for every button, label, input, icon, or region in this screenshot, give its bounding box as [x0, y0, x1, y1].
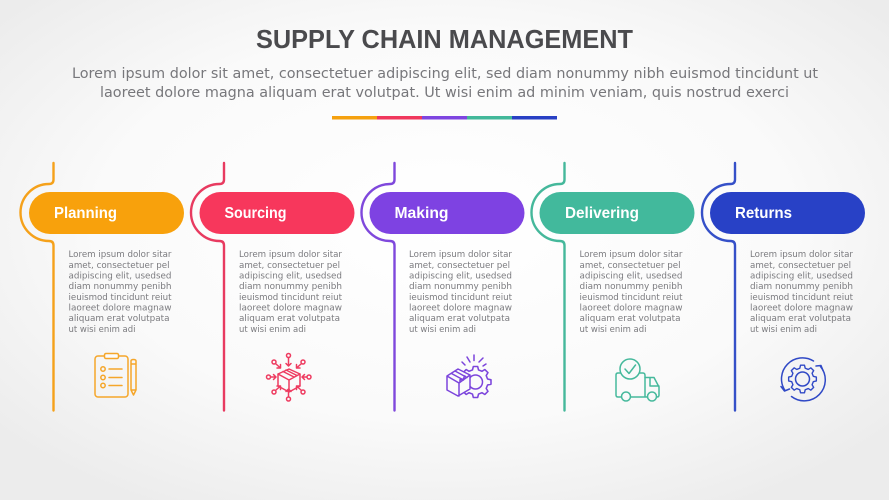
returns text block: [750, 249, 854, 334]
making text block: aliquam erat volutpata: [409, 313, 510, 323]
delivering text block: ut wisi enim adi: [580, 324, 646, 334]
subtitle text: [72, 66, 818, 101]
making text block: ut wisi enim adi: [409, 324, 476, 334]
making text block: Lorem ipsum dolor sitar: [409, 249, 513, 259]
returns connector line: [702, 163, 735, 410]
subtitle text: laoreet dolore magna aliquam erat volutpat. Ut wisi enim ad minim veniam, quis nostrud exerci: [100, 85, 789, 101]
panel: returns: [702, 163, 865, 410]
returns text block: aliquam erat volutpata: [750, 313, 851, 323]
planning text block: [68, 249, 172, 334]
delivering text block: aliquam erat volutpata: [580, 313, 680, 323]
planning text block: ut wisi enim adi: [68, 324, 136, 334]
delivering text block: diam nonummy penibh: [580, 281, 682, 291]
icon: gear with circular arrows: [781, 358, 825, 401]
subtitle text: Lorem ipsum dolor sit amet, consectetuer adipiscing elit, sed diam nonummy nibh euismod tincidunt ut: [72, 66, 818, 82]
sourcing heading pill: [200, 192, 354, 234]
planning connector line: [20, 163, 54, 410]
returns text block: diam nonummy penibh: [750, 281, 853, 291]
delivering heading pill: [540, 192, 694, 234]
panel: making: [362, 163, 524, 410]
planning text block: aliquam erat volutpata: [68, 313, 170, 323]
making text block: adipiscing elit, usedsed: [409, 270, 512, 280]
returns text block: laoreet dolore magnaw: [750, 302, 853, 312]
panel: sourcing: [191, 163, 354, 410]
delivering text block: adipiscing elit, usedsed: [580, 270, 682, 280]
returns heading pill: [710, 192, 865, 234]
returns text block: ieuismod tincidunt reiut: [750, 292, 854, 302]
sourcing text block: aliquam erat volutpata: [239, 313, 340, 323]
planning text block: diam nonummy penibh: [68, 281, 172, 291]
making heading pill: [370, 192, 524, 234]
sourcing text block: adipiscing elit, usedsed: [239, 270, 342, 280]
planning heading: Planning: [54, 205, 117, 222]
sourcing text block: ut wisi enim adi: [239, 324, 306, 334]
delivering text block: [580, 249, 683, 334]
returns text block: amet, consectetuer pel: [750, 260, 851, 270]
colour divider bar: [332, 116, 557, 120]
delivering connector line: [532, 163, 564, 410]
returns heading: Returns: [735, 205, 792, 222]
sourcing text block: laoreet dolore magnaw: [239, 302, 342, 312]
making text block: diam nonummy penibh: [409, 281, 512, 291]
making text block: laoreet dolore magnaw: [409, 302, 512, 312]
sourcing text block: amet, consectetuer pel: [239, 260, 340, 270]
delivering text block: ieuismod tincidunt reiut: [580, 292, 683, 302]
planning text block: ieuismod tincidunt reiut: [68, 292, 172, 302]
planning heading pill: [29, 192, 184, 234]
icon: delivery truck with check: [616, 359, 659, 401]
icon: box with gear: [447, 355, 491, 397]
making text block: amet, consectetuer pel: [409, 260, 510, 270]
making connector line: [362, 163, 394, 410]
sourcing text block: [239, 249, 343, 334]
planning text block: adipiscing elit, usedsed: [68, 270, 172, 280]
making heading: Making: [394, 205, 448, 222]
planning text block: amet, consectetuer pel: [68, 260, 170, 270]
planning text block: Lorem ipsum dolor sitar: [68, 249, 172, 259]
returns text block: Lorem ipsum dolor sitar: [750, 249, 854, 259]
delivering text block: laoreet dolore magnaw: [580, 302, 683, 312]
panel: planning: [20, 163, 184, 410]
title: SUPPLY CHAIN MANAGEMENT: [256, 26, 633, 54]
returns text block: ut wisi enim adi: [750, 324, 817, 334]
delivering text block: Lorem ipsum dolor sitar: [580, 249, 683, 259]
sourcing text block: diam nonummy penibh: [239, 281, 342, 291]
returns text block: adipiscing elit, usedsed: [750, 270, 853, 280]
sourcing heading: Sourcing: [224, 205, 286, 222]
making text block: [409, 249, 513, 334]
sourcing connector line: [191, 163, 224, 410]
delivering heading: Delivering: [565, 205, 639, 222]
making text block: ieuismod tincidunt reiut: [409, 292, 513, 302]
planning text block: laoreet dolore magnaw: [68, 302, 172, 312]
icon: box with radiating arrows: [266, 354, 311, 401]
sourcing text block: ieuismod tincidunt reiut: [239, 292, 343, 302]
sourcing text block: Lorem ipsum dolor sitar: [239, 249, 343, 259]
icon: clipboard checklist and pencil: [95, 354, 136, 397]
delivering text block: amet, consectetuer pel: [580, 260, 680, 270]
panel: delivering: [532, 163, 694, 410]
